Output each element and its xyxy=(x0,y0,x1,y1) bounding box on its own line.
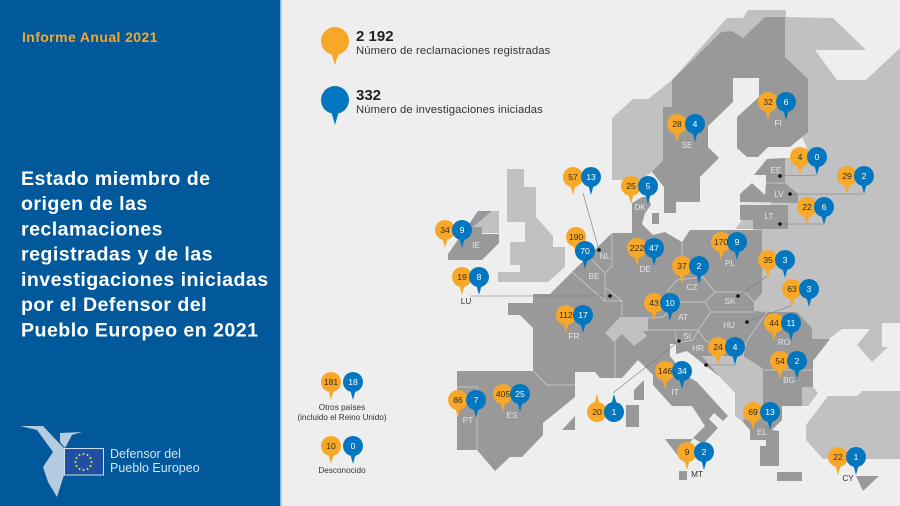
pins: Netherlands: NL xyxy=(600,252,611,261)
map: non-member countries in light grey xyxy=(473,10,900,459)
pins: unknown xyxy=(318,436,366,475)
pins: Greece: 13 xyxy=(765,407,775,417)
pins: Slovakia: 35 xyxy=(763,255,773,265)
pins: Estonia: 4 xyxy=(798,152,803,162)
pins: Hungary xyxy=(723,279,819,330)
logo: European Ombudsman xyxy=(20,426,200,497)
pins: Greece xyxy=(743,402,780,437)
pins: Slovakia: SK xyxy=(725,297,736,306)
pins: Spain: 405 xyxy=(496,389,510,399)
pins: Portugal: 7 xyxy=(474,395,479,405)
main heading: por el Defensor del xyxy=(21,294,207,316)
legend: inquiries opened: 332 xyxy=(356,87,381,104)
report label: Informe Anual 2021 xyxy=(22,29,158,45)
pins: France: 17 xyxy=(578,310,588,320)
pins: Denmark: DK xyxy=(634,203,646,212)
pins: Bulgaria: 2 xyxy=(795,356,800,366)
pins: Cyprus xyxy=(828,447,866,483)
pins: other countries: (incluido el Reino Unido) xyxy=(297,413,387,422)
pins: Czechia: 2 xyxy=(697,261,702,271)
pins: Finland xyxy=(758,92,796,128)
pins: Croatia xyxy=(692,337,745,365)
pins: Spain: ES xyxy=(507,411,518,420)
main heading: reclamaciones xyxy=(21,218,163,240)
pins: Netherlands xyxy=(563,167,611,261)
pins: Czechia: 37 xyxy=(677,261,687,271)
pins: Lithuania: LT xyxy=(765,212,773,221)
pins: Sweden xyxy=(667,114,705,150)
leader dots xyxy=(597,174,792,367)
pins: Hungary: HU xyxy=(723,321,735,330)
pins: Denmark xyxy=(621,176,658,212)
pins: Belgium: 190 xyxy=(569,232,583,242)
pins: Cyprus: 1 xyxy=(854,452,859,462)
pins: France xyxy=(556,305,593,341)
pins: Romania: RO xyxy=(778,338,790,347)
main heading: origen de las xyxy=(21,193,148,215)
pins: Austria: AT xyxy=(678,313,688,322)
pins: Cyprus: 22 xyxy=(833,452,843,462)
pins: Greece: 69 xyxy=(748,407,758,417)
pins: Slovenia: 20 xyxy=(592,407,602,417)
pins: Croatia: HR xyxy=(692,344,704,353)
legend: inquiries opened: Número de investigaciones iniciadas xyxy=(356,104,543,116)
pins: Spain: 25 xyxy=(515,389,525,399)
pins: Romania: 44 xyxy=(769,318,779,328)
pins: unknown: 0 xyxy=(351,441,356,451)
pins: other countries: Otros países xyxy=(319,403,365,412)
pins: Netherlands: 13 xyxy=(586,172,596,182)
pins: Sweden: 4 xyxy=(693,119,698,129)
pins: Greece: EL xyxy=(757,428,767,437)
legend: inquiries opened xyxy=(321,86,543,125)
pins: Malta xyxy=(677,442,714,479)
pins: Austria: 43 xyxy=(649,298,659,308)
leader lines to country pins xyxy=(470,175,863,393)
logo: European Ombudsman: Pueblo Europeo xyxy=(110,461,200,475)
pins: Poland: PL xyxy=(725,259,735,268)
pins: Germany: 222 xyxy=(630,243,644,253)
pins: Latvia: 2 xyxy=(862,171,867,181)
pins: Denmark: 5 xyxy=(646,181,651,191)
pins: Lithuania xyxy=(765,197,834,225)
pins: Denmark: 25 xyxy=(626,181,636,191)
pins: Bulgaria: BG xyxy=(783,376,795,385)
main heading: Pueblo Europeo en 2021 xyxy=(21,320,258,342)
pins: Slovakia: 3 xyxy=(783,255,788,265)
pins: Romania: 11 xyxy=(787,318,796,328)
pins: Ireland: 9 xyxy=(460,225,465,235)
pins: other countries: 18 xyxy=(348,377,358,387)
pins: Italy: IT xyxy=(671,388,679,397)
pins: Luxembourg xyxy=(452,267,489,306)
pins: Malta: 9 xyxy=(685,447,690,457)
pins: Malta: MT xyxy=(691,470,703,479)
pins: Estonia xyxy=(771,147,827,175)
pins: Croatia: 24 xyxy=(713,342,723,352)
pins: Belgium: BE xyxy=(589,272,600,281)
pins: Spain xyxy=(493,384,530,420)
main heading: Estado miembro de xyxy=(21,168,210,190)
main heading: registradas y de las xyxy=(21,244,213,266)
map: national borders xyxy=(457,183,813,450)
pins: Luxembourg: LU xyxy=(461,297,471,306)
pins: Ireland: 34 xyxy=(440,225,450,235)
pins: Belgium: 70 xyxy=(580,246,590,256)
pins: Slovenia xyxy=(587,332,691,422)
pins: Czechia xyxy=(672,256,709,292)
pins: unknown: Desconocido xyxy=(318,466,366,475)
pins: Poland: 170 xyxy=(714,237,728,247)
pins: Poland xyxy=(711,232,747,268)
pins: Hungary: 63 xyxy=(787,284,797,294)
pins: Germany: DE xyxy=(639,265,651,274)
pins: Austria: 10 xyxy=(665,298,675,308)
pins: Germany xyxy=(627,238,664,274)
pins: Italy xyxy=(655,361,692,397)
legend: complaints registered: Número de reclamaciones registradas xyxy=(356,45,551,57)
pins: Portugal: PT xyxy=(463,416,473,425)
legend: complaints registered xyxy=(321,27,551,65)
pins: Bulgaria xyxy=(770,351,807,385)
panel: left blue sidebar xyxy=(0,0,282,506)
pins: Lithuania: 22 xyxy=(802,202,812,212)
pins: Bulgaria: 54 xyxy=(775,356,785,366)
pins: Croatia: 4 xyxy=(733,342,738,352)
pins: France: FR xyxy=(569,332,580,341)
main heading: investigaciones iniciadas xyxy=(21,269,269,291)
pins: Czechia: CZ xyxy=(687,283,697,292)
pins: Austria xyxy=(644,293,688,322)
pins: Romania xyxy=(764,313,801,347)
pins: unknown: 10 xyxy=(326,441,336,451)
pins: Estonia: 0 xyxy=(815,152,820,162)
pins: Ireland: IE xyxy=(472,241,480,250)
pins: Luxembourg: 8 xyxy=(477,272,482,282)
pins: Italy: 34 xyxy=(677,366,687,376)
pins: Portugal xyxy=(448,390,486,425)
pins: Netherlands: 57 xyxy=(568,172,578,182)
main heading xyxy=(21,168,269,342)
pins: Ireland xyxy=(435,220,480,250)
pins: Sweden: 28 xyxy=(672,119,682,129)
pins: Latvia: LV xyxy=(774,190,784,199)
pins: France: 112 xyxy=(559,310,573,320)
pins: Italy: 146 xyxy=(658,366,672,376)
pins: Belgium xyxy=(566,227,600,281)
pins: Estonia: EE xyxy=(771,166,782,175)
pins: Poland: 9 xyxy=(735,237,740,247)
pins: Finland: 6 xyxy=(784,97,789,107)
pins: Finland: 32 xyxy=(763,97,773,107)
map: Switzerland and western Balkans in light grey xyxy=(605,317,763,421)
pins: Latvia: 29 xyxy=(842,171,852,181)
pins: Slovenia: 1 xyxy=(612,407,617,417)
pins: Luxembourg: 19 xyxy=(457,272,467,282)
pins: Cyprus: CY xyxy=(842,474,854,483)
pins: Sweden: SE xyxy=(682,141,693,150)
pins: Slovakia xyxy=(725,250,795,306)
logo: European Ombudsman: Defensor del xyxy=(110,447,181,461)
map: member states in dark grey xyxy=(448,17,879,491)
pins: Malta: 2 xyxy=(702,447,707,457)
legend: complaints registered: 2 192 xyxy=(356,28,394,45)
pins: Germany: 47 xyxy=(649,243,659,253)
pins: Latvia xyxy=(774,166,874,199)
pins: Portugal: 86 xyxy=(453,395,463,405)
pins: Slovenia: SI xyxy=(683,332,691,341)
pins: other countries xyxy=(297,372,387,422)
pins: Lithuania: 6 xyxy=(822,202,827,212)
pins: Finland: FI xyxy=(774,119,782,128)
pins: Hungary: 3 xyxy=(807,284,812,294)
pins: other countries: 181 xyxy=(324,377,338,387)
